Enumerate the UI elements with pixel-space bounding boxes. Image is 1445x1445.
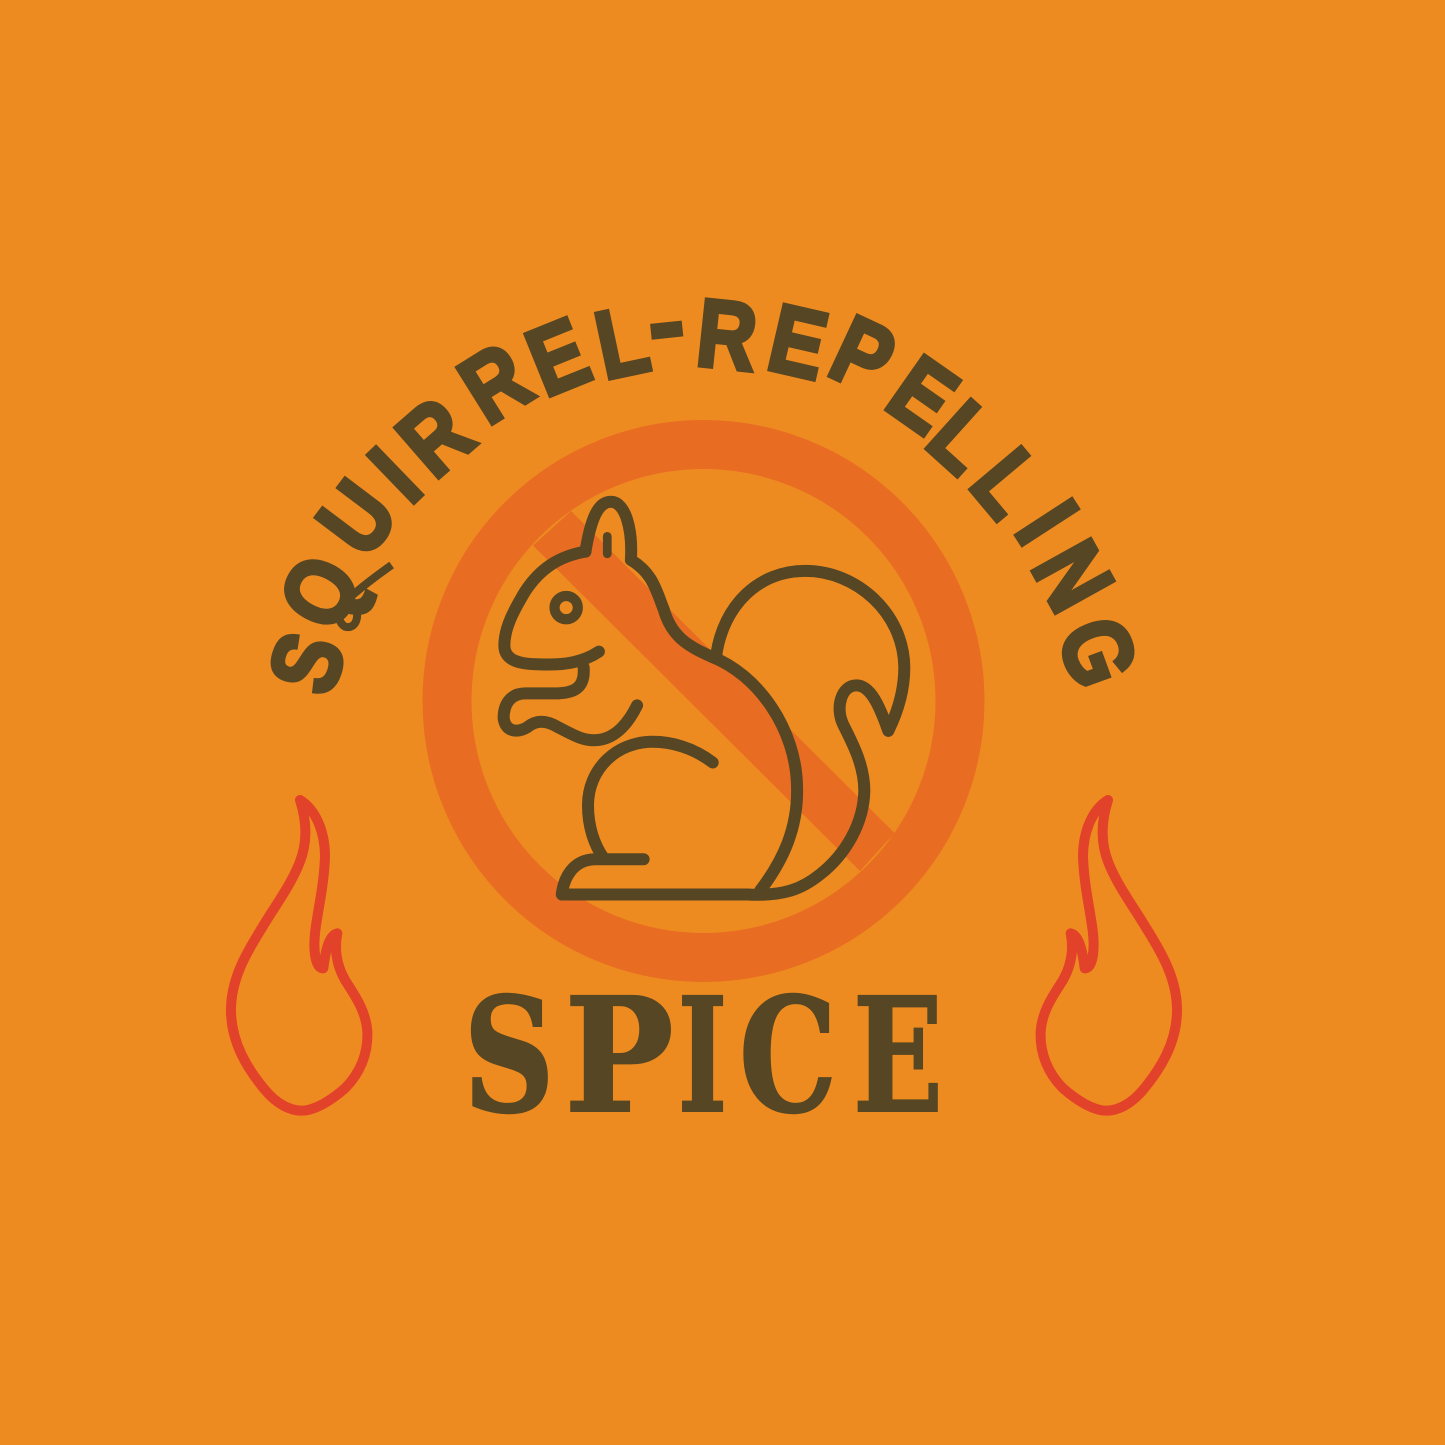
title: spice: I bbox=[678, 963, 727, 1149]
title arc: squirrel-repelling: U bbox=[296, 462, 417, 574]
title arc: squirrel-repelling: L bbox=[586, 284, 657, 399]
icon: left flame bbox=[231, 800, 367, 1111]
icon: prohibition sign bbox=[447, 444, 960, 958]
title arc: squirrel-repelling: E bbox=[870, 335, 976, 454]
title arc: squirrel-repelling: E bbox=[759, 283, 837, 400]
title arc: squirrel-repelling: R bbox=[377, 377, 492, 497]
title arc: squirrel-repelling: N bbox=[1012, 524, 1135, 628]
title arc: squirrel-repelling: R bbox=[441, 321, 548, 444]
title arc: squirrel-repelling: G bbox=[1037, 604, 1160, 700]
title arc: squirrel-repelling: - bbox=[643, 268, 689, 378]
title arc: squirrel-repelling: P bbox=[816, 294, 911, 415]
title arc: squirrel-repelling: Q bbox=[257, 538, 382, 645]
title arc: squirrel-repelling: I bbox=[349, 428, 440, 521]
title arc: squirrel-repelling: E bbox=[512, 296, 603, 417]
title: spice: P bbox=[564, 962, 674, 1148]
title arc: squirrel-repelling bbox=[247, 268, 1160, 705]
title arc: squirrel-repelling: R bbox=[692, 278, 762, 391]
title: spice bbox=[463, 962, 943, 1149]
title arc: squirrel-repelling: S bbox=[247, 620, 366, 705]
title arc: squirrel-repelling: L bbox=[909, 380, 1018, 493]
icon: squirrel bbox=[504, 502, 904, 895]
title: spice: E bbox=[853, 963, 943, 1148]
title: spice: S bbox=[463, 963, 555, 1149]
title: spice: C bbox=[739, 964, 837, 1149]
title arc: squirrel-repelling: L bbox=[951, 429, 1066, 536]
icon: right flame bbox=[1041, 800, 1177, 1111]
title arc: squirrel-repelling: I bbox=[996, 483, 1099, 561]
